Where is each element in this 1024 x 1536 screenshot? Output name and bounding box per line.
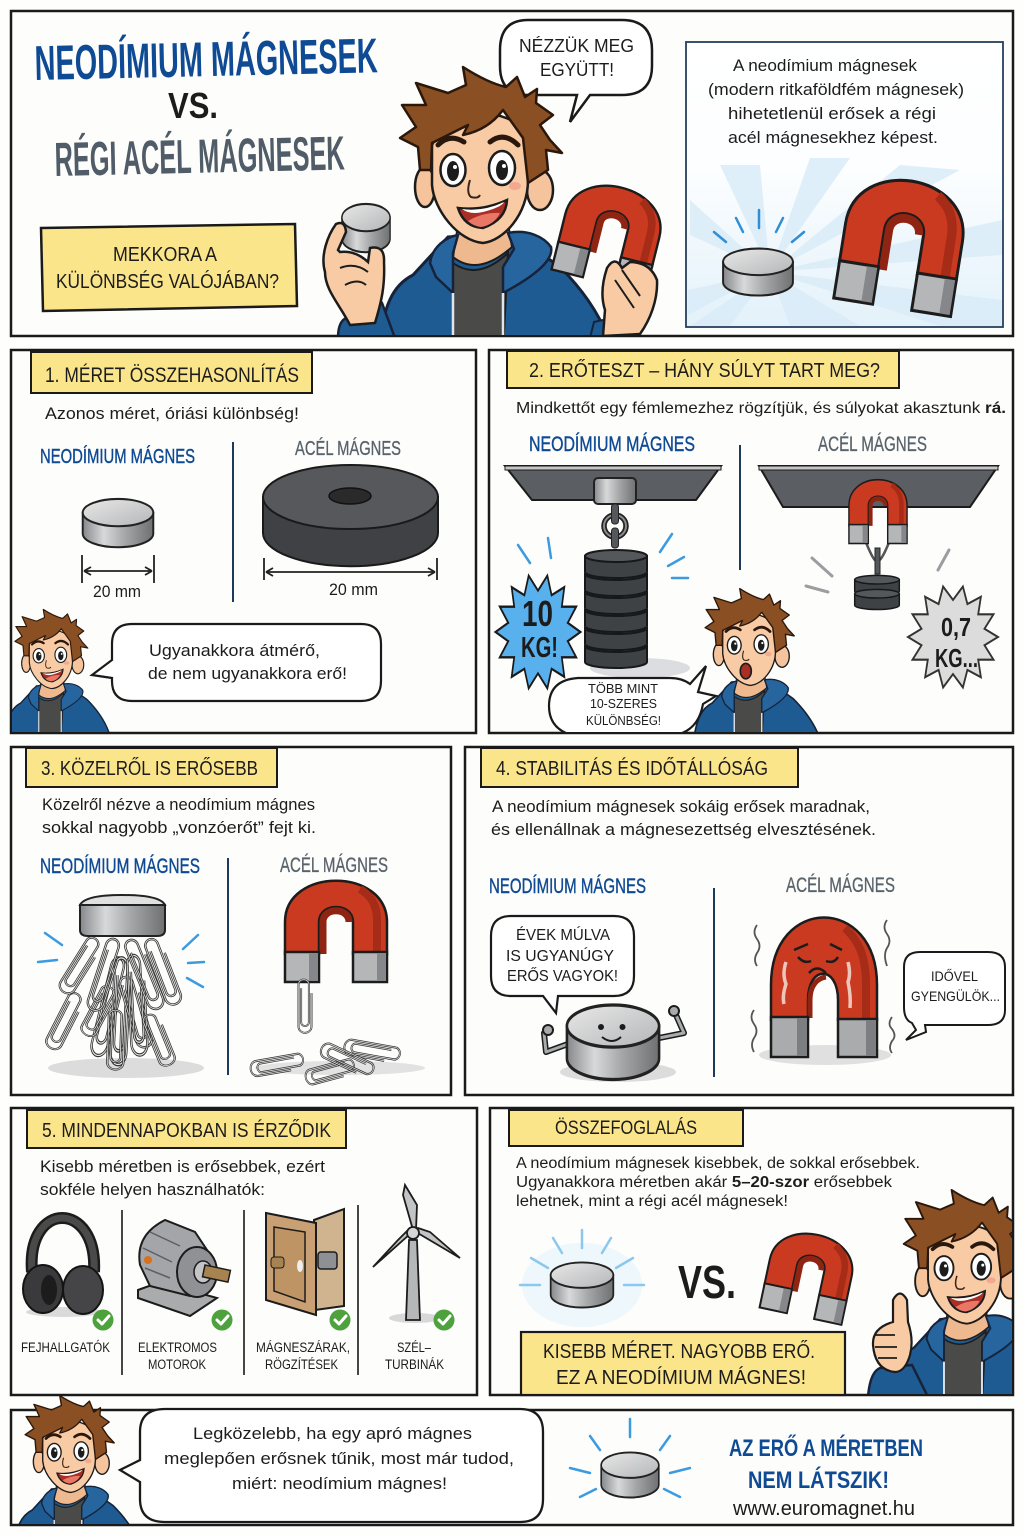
text block xyxy=(516,1155,920,1210)
speech bubble: years later xyxy=(491,916,634,1013)
character: boy xyxy=(12,608,110,732)
heading tab xyxy=(26,748,277,787)
speech bubble: weakening over time xyxy=(904,952,1005,1040)
burst: 10 kg: 10 xyxy=(522,593,553,634)
title: neodymium magnets: NEODÍMIUM MÁGNESEK xyxy=(34,29,378,91)
panel 3: stronger up close xyxy=(11,747,451,1095)
icon: headphones xyxy=(23,1218,103,1317)
burst: 0,7 kg: KG... xyxy=(935,643,978,673)
panel: intro text with magnets: A neodímium mágnesek xyxy=(733,56,917,75)
panel: hero header xyxy=(11,11,1013,353)
label: MÁGNESZÁRAK, xyxy=(256,1340,350,1355)
speech bubble: closing text: miért: neodímium mágnes! xyxy=(232,1474,447,1493)
speech bubble: more than tenfold: TÖBB MINT xyxy=(588,682,658,696)
icon: sad tired horseshoe magnet xyxy=(752,918,894,1065)
burst: 10 kg xyxy=(496,576,580,688)
label: neodymium: NEODÍMIUM MÁGNES xyxy=(489,875,646,898)
speech bubble: let's look together: NÉZZÜK MEG xyxy=(519,36,634,56)
speech bubble: closing text: meglepően erősnek tűnik, most már tudod, xyxy=(164,1449,514,1468)
icon: small neodymium disc xyxy=(83,499,153,547)
character: surprised boy xyxy=(694,588,818,732)
heading tab: ÖSSZEFOGLALÁS xyxy=(555,1118,697,1139)
speech bubble: years later: ERŐS VAGYOK! xyxy=(507,966,618,985)
speech bubble: more than tenfold: KÜLÖNBSÉG! xyxy=(586,713,661,728)
icon: steel horseshoe xyxy=(760,1226,859,1325)
panel: intro text with magnets: acél mágnesekhez képest. xyxy=(728,128,938,147)
icon: steel horseshoe magnet xyxy=(834,172,971,316)
text block: sokkal nagyobb „vonzóerőt” fejt ki. xyxy=(42,819,316,837)
label: TURBINÁK xyxy=(385,1357,444,1372)
icon: left sleeve xyxy=(338,303,395,338)
text: vs: VS. xyxy=(678,1256,736,1308)
speech bubble: de nem ugyanakkora erő! xyxy=(148,664,347,683)
label xyxy=(138,1340,217,1372)
icon: sleeve xyxy=(868,1365,928,1397)
text block: Azonos méret, óriási különbség! xyxy=(45,405,299,423)
icon: stack of weights xyxy=(585,550,690,678)
icon: check xyxy=(92,1310,114,1330)
heading tab: 5. MINDENNAPOKBAN IS ÉRZŐDIK xyxy=(42,1119,332,1142)
text block: Ugyanakkora méretben akár 5–20-szor erősebbek xyxy=(516,1174,892,1191)
callout: how big is the difference: KÜLÖNBSÉG VALÓJÁBAN? xyxy=(56,270,279,293)
label: neodymium: NEODÍMIUM MÁGNES xyxy=(40,855,200,878)
label: steel: ACÉL MÁGNES xyxy=(786,874,895,897)
heading tab xyxy=(27,1110,346,1148)
speech bubble: let's look together xyxy=(500,20,652,122)
plate: neodymium test xyxy=(505,466,721,500)
speech bubble: years later: ÉVEK MÚLVA xyxy=(516,925,610,944)
label: neodymium: NEODÍMIUM MÁGNES xyxy=(529,433,695,456)
panel 6: summary xyxy=(490,1108,1024,1407)
icon: neodymium disc with rays xyxy=(520,1230,644,1327)
speech bubble: years later: IS UGYANÚGY xyxy=(506,946,614,965)
panel: intro text with magnets: hihetetlenül erősek a régi xyxy=(728,104,936,123)
speech bubble: weakening over time: IDŐVEL xyxy=(931,968,978,984)
text block: A neodímium mágnesek sokáig erősek maradnak, xyxy=(492,798,870,816)
heading tab: 4. STABILITÁS ÉS IDŐTÁLLÓSÁG xyxy=(496,757,768,780)
dimension: neodymium 20 mm: 20 mm xyxy=(93,582,141,601)
icon: check xyxy=(330,1310,350,1330)
panel: footer xyxy=(11,1396,1013,1536)
title: vs: VS. xyxy=(168,85,218,126)
icon: neodymium magnet with many paperclips xyxy=(44,895,204,1078)
label: steel: ACÉL MÁGNES xyxy=(818,433,927,456)
text block xyxy=(40,1158,325,1199)
label xyxy=(256,1340,350,1372)
speech bubble: let's look together: EGYÜTT! xyxy=(540,60,614,80)
motion ticks grey xyxy=(806,550,949,592)
slogan: AZ ERŐ A MÉRETBEN xyxy=(729,1434,923,1462)
speech bubble: weakening over time: GYENGÜLÖK... xyxy=(911,987,1000,1004)
text block: lehetnek, mint a régi acél mágnesek! xyxy=(516,1193,788,1210)
label: SZÉL– xyxy=(397,1340,431,1355)
title: old steel magnets: RÉGI ACÉL MÁGNESEK xyxy=(54,126,345,187)
speech bubble: Ugyanakkora átmérő, xyxy=(149,641,320,660)
character: boy with thumbs up xyxy=(867,1189,1012,1394)
speech bubble: closing text xyxy=(120,1409,543,1522)
speech bubble xyxy=(92,624,381,701)
icon: door with magnetic lock xyxy=(266,1209,344,1315)
heading tab: 2. ERŐTESZT – HÁNY SÚLYT TART MEG? xyxy=(529,359,880,382)
panel: intro text with magnets xyxy=(686,42,1003,327)
motion ticks blue xyxy=(518,534,688,578)
icon: happy strong magnet xyxy=(543,1005,684,1082)
text block: Kisebb méretben is erősebbek, ezért xyxy=(40,1158,325,1176)
label: ELEKTROMOS xyxy=(138,1340,217,1355)
dimension: steel 20 mm xyxy=(264,558,437,599)
heading tab xyxy=(507,351,899,388)
heading tab xyxy=(481,748,798,787)
panel 4: stability and durability xyxy=(465,747,1013,1095)
text block: A neodímium mágnesek kisebbek, de sokkal erősebbek. xyxy=(516,1155,920,1172)
heading tab xyxy=(509,1110,743,1146)
panel 2: force test xyxy=(489,350,1013,746)
icon: steel horseshoe with one clip xyxy=(285,881,387,1033)
icon: wind turbine xyxy=(373,1185,460,1323)
icon: electric motor xyxy=(138,1220,230,1316)
icon: check xyxy=(212,1310,232,1330)
dimension: steel 20 mm: 20 mm xyxy=(329,580,378,599)
burst: 10 kg: KG! xyxy=(521,632,558,664)
burst: 0,7 kg xyxy=(908,587,998,687)
label: neodymium: NEODÍMIUM MÁGNES xyxy=(40,445,195,468)
burst: 0,7 kg: 0,7 xyxy=(941,612,971,642)
label: RÖGZÍTÉSEK xyxy=(265,1357,338,1372)
icon: neodymium magnet holding chain xyxy=(594,478,636,548)
slogan: NEM LÁTSZIK! xyxy=(748,1466,889,1494)
callout: smaller size bigger force: EZ A NEODÍMIUM MÁGNES! xyxy=(556,1366,806,1389)
icon: check xyxy=(434,1310,454,1330)
panel 1: size comparison xyxy=(5,350,476,738)
text block: Mindkettőt egy fémlemezhez rögzítjük, és súlyokat akasztunk rá. xyxy=(516,400,1006,417)
slogan xyxy=(729,1434,923,1494)
label: MOTOROK xyxy=(148,1357,206,1372)
speech bubble: more than tenfold: 10-SZERES xyxy=(590,697,657,711)
icon: thumbs-up hand xyxy=(873,1294,912,1372)
label: steel: ACÉL MÁGNES xyxy=(280,854,388,877)
character: presenter boy holding magnets xyxy=(323,67,669,353)
speech bubble: more than tenfold xyxy=(549,666,716,736)
speech bubble: closing text: Legközelebb, ha egy apró mágnes xyxy=(193,1424,472,1443)
text block xyxy=(491,798,876,839)
icon: neodymium disc with rays xyxy=(714,210,804,296)
label xyxy=(385,1340,444,1372)
website url: www.euromagnet.hu xyxy=(732,1498,915,1520)
icon: large steel ring magnet xyxy=(263,465,438,566)
callout: smaller size bigger force: KISEBB MÉRET. NAGYOBB ERŐ. xyxy=(543,1340,815,1363)
plate: steel test xyxy=(759,466,998,507)
text block: és ellenállnak a mágnesezettség elvesztésének. xyxy=(491,821,876,839)
heading tab xyxy=(31,352,312,393)
panel 5: everyday use xyxy=(11,1108,477,1395)
icon: red horseshoe magnet xyxy=(550,184,662,279)
icon: right hand xyxy=(590,262,657,338)
callout: how big is the difference: MEKKORA A xyxy=(113,244,218,266)
icon: steel horseshoe with small weight xyxy=(849,480,907,610)
heading tab: 3. KÖZELRŐL IS ERŐSEBB xyxy=(41,757,258,780)
icon: neodymium disc with rays xyxy=(570,1419,690,1498)
label: FEJHALLGATÓK xyxy=(21,1340,110,1355)
text block xyxy=(42,796,316,837)
motion ticks blue xyxy=(38,933,204,987)
callout: smaller size bigger force xyxy=(521,1332,845,1395)
heading tab: 1. MÉRET ÖSSZEHASONLÍTÁS xyxy=(45,364,299,387)
character: boy xyxy=(18,1395,130,1524)
icon: left hand xyxy=(323,223,384,325)
text block: sokféle helyen használhatók: xyxy=(40,1181,265,1199)
dimension: neodymium 20 mm xyxy=(82,555,154,601)
icon: loose paperclips xyxy=(249,1039,425,1086)
text block: Közelről nézve a neodímium mágnes xyxy=(42,796,315,814)
callout: how big is the difference xyxy=(41,224,297,311)
panel: intro text with magnets: (modern ritkaföldfém mágnesek) xyxy=(708,80,964,99)
icon: neodymium disc in hand xyxy=(342,204,390,252)
label: steel: ACÉL MÁGNES xyxy=(295,437,401,460)
